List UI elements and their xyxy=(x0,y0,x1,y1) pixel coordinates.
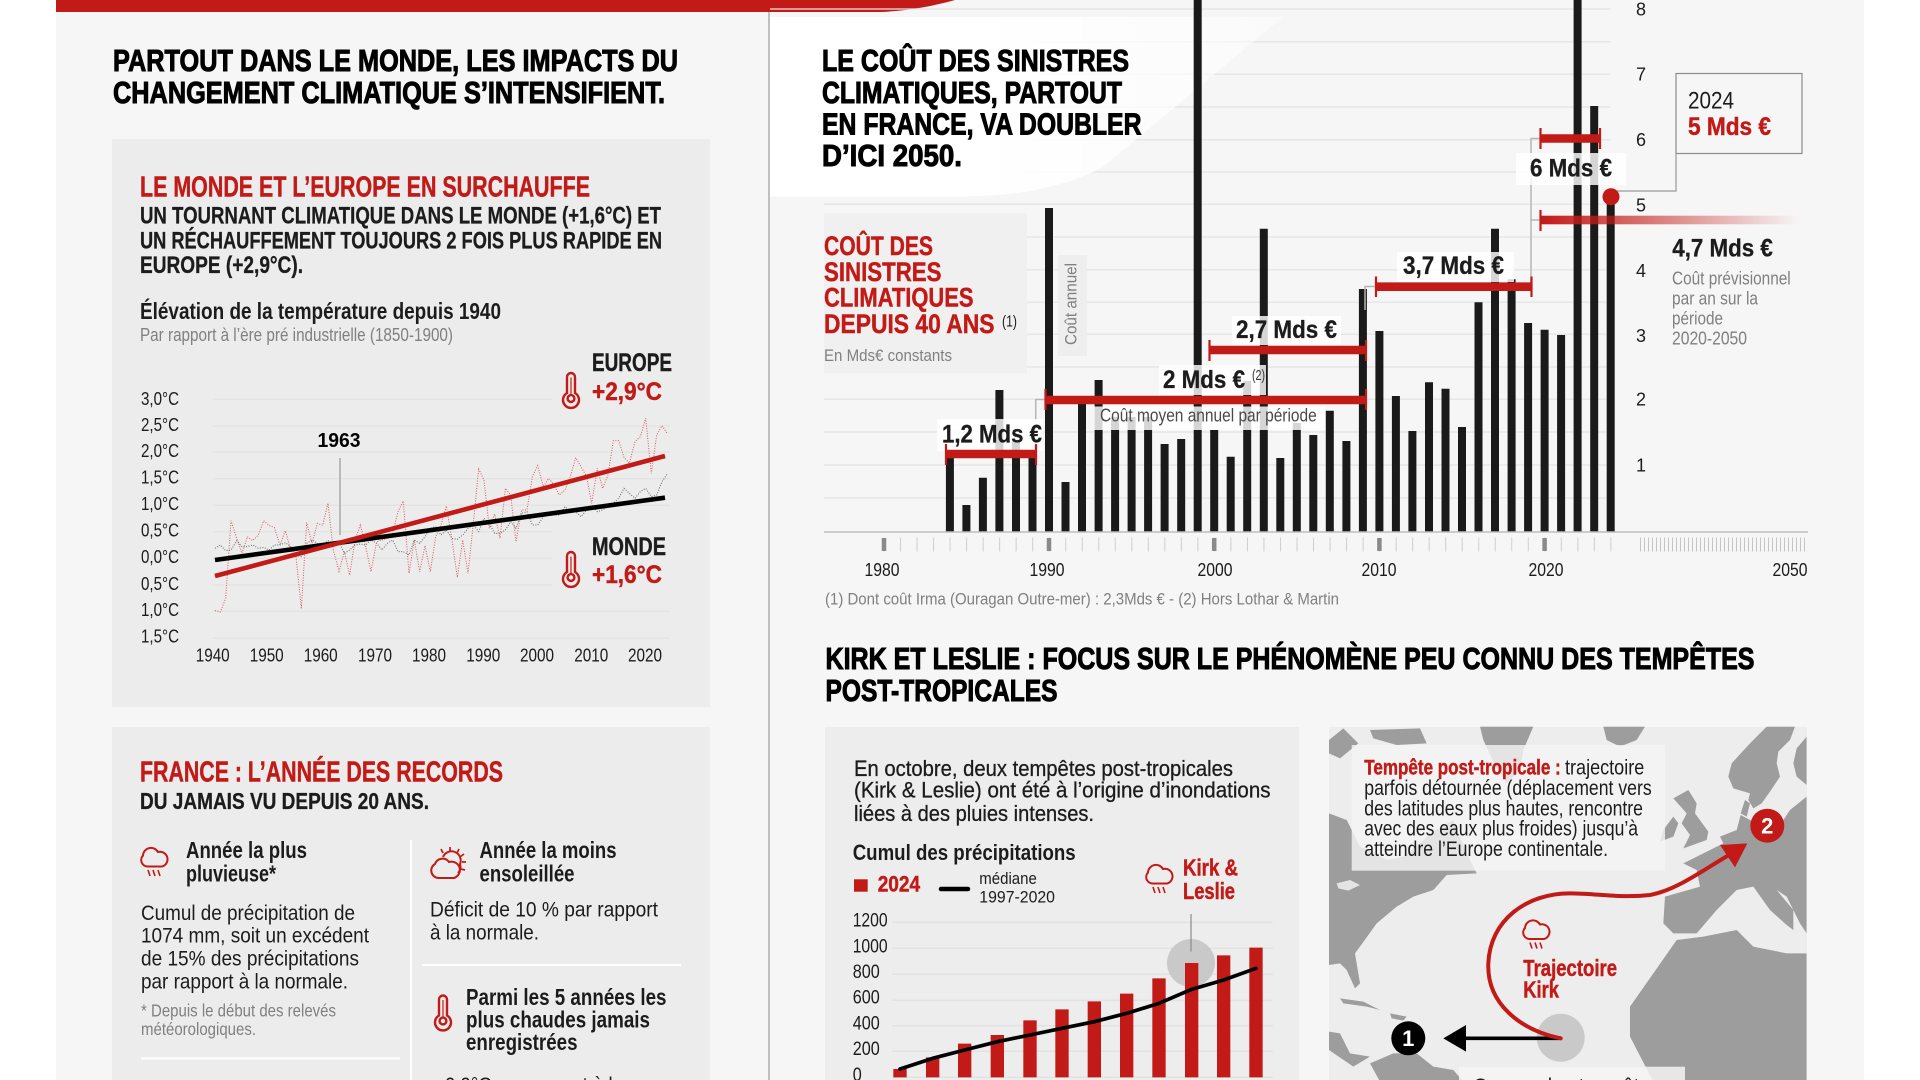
projection bar 4,7 Mds xyxy=(1540,210,1800,231)
panel subheading: UN TOURNANT CLIMATIQUE DANS LE MONDE (+1,6°C) ET xyxy=(140,202,661,230)
trend: europe xyxy=(215,456,665,576)
label monde xyxy=(592,533,666,589)
panel: cumul des précipitations xyxy=(825,727,1299,1080)
y axis labels: 600 xyxy=(853,988,880,1008)
block: année la moins ensoleillée: Année la moins xyxy=(480,837,616,863)
cost section title: EN FRANCE, VA DOUBLER xyxy=(822,106,1142,141)
block: année la moins ensoleillée: à la normale. xyxy=(430,920,539,944)
period average: 2 Mds xyxy=(1045,365,1366,430)
chart grid xyxy=(892,922,1273,1077)
y axis labels xyxy=(141,389,179,646)
x axis labels xyxy=(196,646,662,666)
block: année la plus pluvieuse: Cumul de précipitation de xyxy=(141,901,355,925)
y axis labels: 0,0°C xyxy=(141,547,179,567)
trend: monde xyxy=(215,498,665,560)
period average: 6 Mds: 6 Mds € xyxy=(1530,155,1612,183)
Kirk section title: POST-TROPICALES xyxy=(826,673,1058,708)
x axis year labels: 2020 xyxy=(1528,560,1564,580)
y axis labels: 0,5°C xyxy=(141,520,179,540)
x axis labels: 1940 xyxy=(196,646,230,666)
x axis year labels: 1990 xyxy=(1030,560,1064,580)
label: trajectoire Kirk: Kirk xyxy=(1523,977,1559,1003)
y axis labels: 6 xyxy=(1636,130,1646,150)
icon: rain cloud xyxy=(1523,920,1550,948)
y axis labels: 1,0°C xyxy=(141,494,179,514)
panel: France année des records xyxy=(112,727,710,1080)
legend xyxy=(854,869,1055,906)
bar chart: precipitation 2024 xyxy=(900,948,1256,1077)
icon: rain cloud xyxy=(1146,865,1173,893)
x axis year labels: 2010 xyxy=(1362,560,1396,580)
legend: 1997-2020 xyxy=(979,887,1055,906)
y axis labels: 1000 xyxy=(853,936,888,958)
panel: chart legend block: CLIMATIQUES xyxy=(824,283,974,313)
text: projection: période xyxy=(1672,308,1723,328)
y axis labels: 1,5°C xyxy=(141,468,179,488)
y axis labels: 2 xyxy=(1636,390,1646,410)
x axis year labels: 1980 xyxy=(864,560,900,580)
text: definition: trajectoire xyxy=(1565,756,1644,779)
text: definition xyxy=(1364,756,1652,861)
block: année la plus pluvieuse: météorologiques. xyxy=(141,1019,256,1039)
label monde: MONDE xyxy=(592,533,666,561)
text: definition: Tempête post-tropicale : xyxy=(1364,756,1561,779)
intro text: En octobre, deux tempêtes post-tropicales xyxy=(854,756,1233,781)
y axis labels xyxy=(853,910,888,1080)
left section title: CHANGEMENT CLIMATIQUE S’INTENSIFIENT. xyxy=(113,75,665,110)
label: trajectoire Kirk: Trajectoire xyxy=(1523,955,1617,981)
text: projection: 4,7 Mds € xyxy=(1672,235,1773,263)
text: definition: avec des eaux plus froides) jusqu’à xyxy=(1364,818,1638,841)
period average: 2 Mds: (2) xyxy=(1252,367,1265,384)
x axis year labels xyxy=(864,560,1808,580)
panel: chart legend block: COÛT DES xyxy=(824,230,933,261)
y axis labels: 7 xyxy=(1636,64,1646,84)
callout: 2024 xyxy=(1602,74,1802,205)
y axis labels: 1 xyxy=(1636,456,1646,476)
cost section title: D’ICI 2050. xyxy=(822,138,962,173)
callout: 2024: 2024 xyxy=(1688,87,1734,114)
label: trajectoire Kirk xyxy=(1523,955,1617,1003)
panel: le monde et l'Europe en surchauffe xyxy=(112,139,710,707)
period average: 3,7 Mds: 3,7 Mds € xyxy=(1403,252,1504,280)
cost section title xyxy=(822,42,1142,173)
label: coût annuel: Coût annuel xyxy=(1062,263,1080,345)
period average: 6 Mds xyxy=(1516,128,1626,185)
annotation 1963 xyxy=(318,430,360,535)
x axis year labels: 2050 xyxy=(1772,560,1808,580)
icon: sun behind cloud xyxy=(431,847,466,878)
text: projection xyxy=(1672,235,1791,348)
period average: 2,7 Mds: 2,7 Mds € xyxy=(1236,316,1337,344)
y axis labels: 3,0°C xyxy=(141,389,179,409)
y axis labels: 0,5°C xyxy=(141,574,179,594)
y axis labels xyxy=(1636,0,1646,476)
grid lines: cost chart xyxy=(770,9,1611,498)
y axis labels: 1200 xyxy=(853,910,888,932)
y axis labels: 1,0°C xyxy=(141,600,179,620)
footnote: (1) Dont coût Irma (Ouragan Outre-mer) : 2,3Mds € - (2) Hors Lothar & Martin xyxy=(825,590,1339,609)
chart title: Cumul des précipitations xyxy=(853,840,1076,865)
text: projection: 2020-2050 xyxy=(1672,328,1747,348)
period average: 3,7 Mds xyxy=(1376,252,1532,297)
text: definition: parfois détournée (déplacement vers xyxy=(1364,777,1652,800)
period average: 1,2 Mds xyxy=(937,419,1043,465)
y axis labels: 8 xyxy=(1636,0,1646,20)
cost section title: LE COÛT DES SINISTRES xyxy=(822,42,1129,78)
text: projection: Coût prévisionnel xyxy=(1672,268,1791,288)
intro text: (Kirk & Leslie) ont été à l’origine d’inondations xyxy=(854,778,1270,803)
block: année la plus pluvieuse: * Depuis le début des relevés xyxy=(141,1000,336,1020)
label europe xyxy=(592,349,672,406)
y axis labels: 3 xyxy=(1636,326,1646,346)
label: coût annuel xyxy=(1058,255,1087,356)
chart subtitle: Par rapport à l’ère pré industrielle (1850-1900) xyxy=(140,325,453,345)
block: années les plus chaudes xyxy=(445,984,666,1080)
block: année la plus pluvieuse: de 15% des précipitations xyxy=(141,946,359,970)
x axis labels: 1980 xyxy=(412,646,446,666)
y axis labels: 5 xyxy=(1636,196,1646,216)
block: année la plus pluvieuse: pluvieuse* xyxy=(186,860,276,886)
bar chart: annual cost xyxy=(950,0,1611,532)
white swoosh behind cost title xyxy=(770,17,1283,196)
block: année la plus pluvieuse: 1074 mm, soit un excédent xyxy=(141,924,369,948)
left section title: PARTOUT DANS LE MONDE, LES IMPACTS DU xyxy=(113,43,678,78)
arrow: black westward track xyxy=(1443,1025,1561,1052)
x axis labels: 1970 xyxy=(358,646,392,666)
legend: médiane xyxy=(979,869,1037,888)
label europe: +2,9°C xyxy=(592,378,662,406)
text: projection: par an sur la xyxy=(1672,288,1759,308)
block: année la moins ensoleillée: ensoleillée xyxy=(480,860,574,886)
panel: chart legend block: (1) xyxy=(1002,314,1017,330)
label europe: EUROPE xyxy=(592,349,672,377)
annotation 1963: 1963 xyxy=(318,430,360,452)
period average: 2 Mds: Coût moyen annuel par période xyxy=(1100,406,1317,426)
marker 2 xyxy=(1750,809,1784,843)
panel subheading: UN RÉCHAUFFEMENT TOUJOURS 2 FOIS PLUS RAPIDE EN xyxy=(140,226,662,254)
marker 2: 2 xyxy=(1761,814,1773,838)
arrow: red Kirk trajectory xyxy=(1488,843,1747,1038)
y axis labels: 2,0°C xyxy=(141,441,179,461)
cost section title: CLIMATIQUES, PARTOUT xyxy=(822,75,1122,110)
dotted series xyxy=(215,418,668,612)
text: definition: des latitudes plus hautes, rencontre xyxy=(1364,798,1643,821)
intro text: liées à des pluies intenses. xyxy=(854,801,1094,826)
icon: thermometer xyxy=(435,996,451,1030)
block: années les plus chaudes: Parmi les 5 années les xyxy=(466,984,666,1010)
connector lines xyxy=(1036,138,1541,420)
map land xyxy=(1329,727,1807,1080)
panel heading: LE MONDE ET L’EUROPE EN SURCHAUFFE xyxy=(140,172,590,204)
x axis labels: 2020 xyxy=(628,646,662,666)
intro text xyxy=(854,756,1270,826)
callout: Kirk et Leslie: Leslie xyxy=(1183,878,1235,904)
chart title: Élévation de la température depuis 1940 xyxy=(140,297,501,324)
panel: map of storm trajectory xyxy=(1329,727,1807,1080)
panel: chart legend block xyxy=(824,214,1027,374)
callout box: bottom xyxy=(1459,1067,1685,1080)
y axis labels: 200 xyxy=(853,1039,880,1060)
panel: chart legend block: En Mds€ constants xyxy=(824,346,952,365)
y axis labels: 800 xyxy=(853,962,880,983)
callout: Kirk et Leslie: Kirk & xyxy=(1183,855,1238,881)
y axis labels: 2,5°C xyxy=(141,415,179,435)
panel subheading xyxy=(140,202,662,279)
block: année la plus pluvieuse xyxy=(141,837,369,1039)
text: definition: atteindre l’Europe continentale. xyxy=(1364,838,1608,861)
block: année la moins ensoleillée: Déficit de 10 % par rapport xyxy=(430,898,658,922)
icon: thermometer europe xyxy=(563,373,579,408)
panel heading: FRANCE : L’ANNÉE DES RECORDS xyxy=(140,754,503,788)
period average: 2 Mds: 2 Mds € xyxy=(1163,366,1245,394)
marker 1 xyxy=(1391,1021,1425,1055)
panel: chart legend block: SINISTRES xyxy=(824,257,942,287)
origin circle xyxy=(1537,1014,1585,1062)
marker 1: 1 xyxy=(1402,1026,1414,1051)
period average: 1,2 Mds: 1,2 Mds € xyxy=(942,421,1042,449)
callout box: definition xyxy=(1352,745,1665,871)
legend: 2024 xyxy=(878,872,921,897)
median line xyxy=(900,968,1256,1069)
panel subheading: DU JAMAIS VU DEPUIS 20 ANS. xyxy=(140,788,429,814)
column separator xyxy=(768,12,770,1080)
left section title xyxy=(113,43,678,110)
icon: rain cloud xyxy=(141,848,168,876)
block: années les plus chaudes: enregistrées xyxy=(466,1029,578,1055)
block: années les plus chaudes: plus chaudes jamais xyxy=(466,1006,650,1032)
Kirk section title xyxy=(826,640,1754,708)
panel: chart legend block: DEPUIS 40 ANS xyxy=(824,309,994,339)
highlight circle xyxy=(1167,939,1215,987)
icon: thermometer monde xyxy=(563,552,579,587)
callout: 2024: 5 Mds € xyxy=(1688,113,1771,141)
x axis labels: 2000 xyxy=(520,646,554,666)
x axis line and ticks xyxy=(824,532,1808,551)
period average: 2,7 Mds xyxy=(1209,316,1366,361)
line chart: temperature xyxy=(141,389,670,666)
x axis labels: 1950 xyxy=(250,646,284,666)
block: année la plus pluvieuse: Année la plus xyxy=(186,837,307,863)
x axis labels: 1960 xyxy=(304,646,338,666)
block: année la moins ensoleillée xyxy=(430,837,658,944)
x axis year labels: 2000 xyxy=(1198,560,1232,580)
callout: Kirk et Leslie xyxy=(1183,855,1238,904)
x axis labels: 1990 xyxy=(466,646,500,666)
y axis labels: 4 xyxy=(1636,261,1646,281)
y axis labels: 1,5°C xyxy=(141,626,179,646)
label monde: +1,6°C xyxy=(592,561,662,589)
panel subheading: EUROPE (+2,9°C). xyxy=(140,252,303,279)
block: année la plus pluvieuse: par rapport à la normale. xyxy=(141,970,348,994)
x axis labels: 2010 xyxy=(574,646,608,666)
top red banner xyxy=(56,0,955,12)
y axis labels: 400 xyxy=(853,1014,880,1034)
